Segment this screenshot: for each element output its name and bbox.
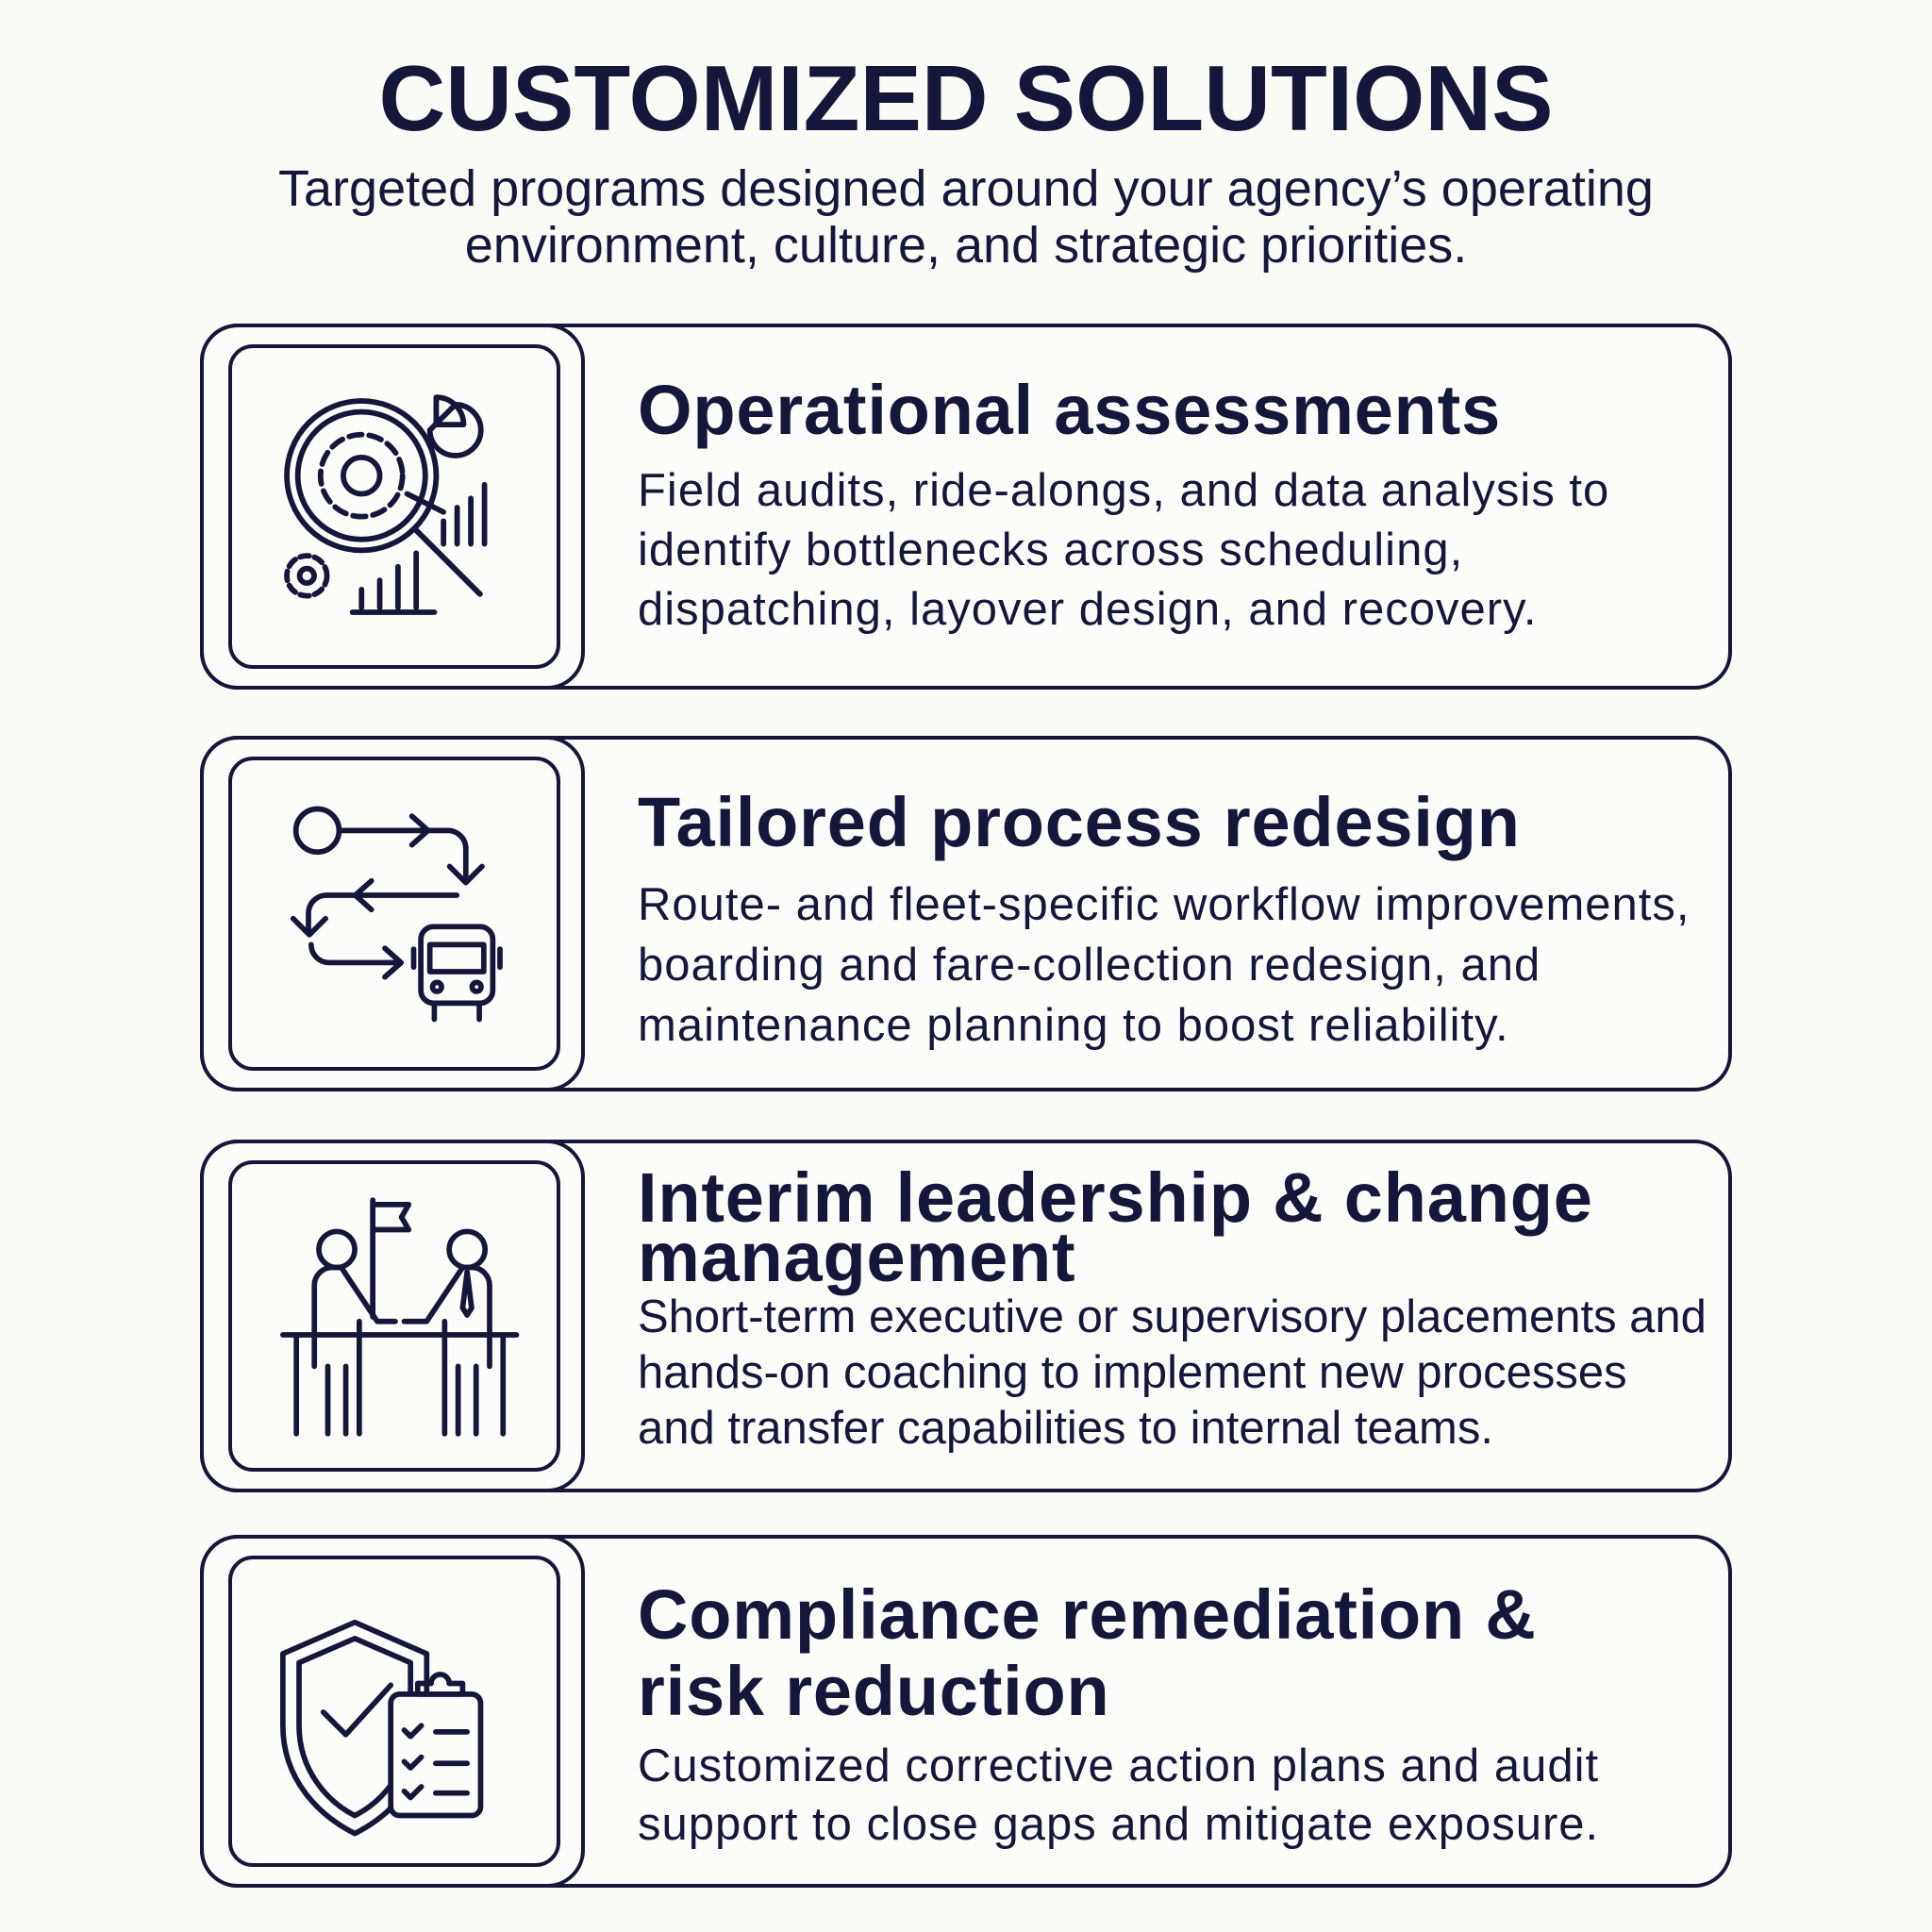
body text: [638, 465, 1609, 635]
body text: [638, 1291, 1707, 1454]
body text: maintenance planning to boost reliability.: [638, 1000, 1509, 1051]
panel: interim leadership: [200, 1140, 1732, 1492]
subtitle: Targeted programs designed around your agency’s operating: [278, 160, 1654, 217]
heading: Interim leadership & change: [638, 1158, 1593, 1237]
body text: identify bottlenecks across scheduling,: [638, 525, 1463, 575]
panel: tailored process redesign: [200, 736, 1732, 1091]
panel: operational assessments: [200, 324, 1732, 690]
body text: Short-term executive or supervisory placements and: [638, 1291, 1707, 1342]
heading: Operational assessments: [638, 371, 1501, 449]
icon: process flow with bus: [228, 757, 560, 1071]
body text: [638, 879, 1690, 1051]
panel: compliance remediation: [200, 1535, 1732, 1888]
body text: dispatching, layover design, and recovery.: [638, 584, 1538, 635]
title: CUSTOMIZED SOLUTIONS: [378, 46, 1553, 150]
subtitle: [278, 160, 1654, 274]
heading: Compliance remediation &: [638, 1575, 1537, 1654]
body text: Customized corrective action plans and audit: [638, 1740, 1599, 1791]
icon: two people handshake with flag: [228, 1160, 560, 1472]
heading: management: [638, 1218, 1075, 1296]
icon: magnifier with gears and charts: [228, 344, 560, 669]
heading: risk reduction: [638, 1652, 1110, 1730]
body text: support to close gaps and mitigate exposure.: [638, 1799, 1599, 1850]
body text: boarding and fare-collection redesign, and: [638, 940, 1541, 991]
heading: Tailored process redesign: [638, 783, 1521, 861]
body text: hands-on coaching to implement new processes: [638, 1347, 1627, 1398]
icon: shield with check and clipboard: [228, 1556, 560, 1867]
body text: [638, 1740, 1599, 1850]
heading: [638, 1575, 1537, 1730]
body text: Field audits, ride-alongs, and data analysis to: [638, 465, 1609, 516]
heading: [638, 1158, 1593, 1296]
body text: Route- and fleet-specific workflow improvements,: [638, 879, 1690, 930]
subtitle: environment, culture, and strategic priorities.: [465, 217, 1467, 274]
body text: and transfer capabilities to internal teams.: [638, 1403, 1493, 1454]
